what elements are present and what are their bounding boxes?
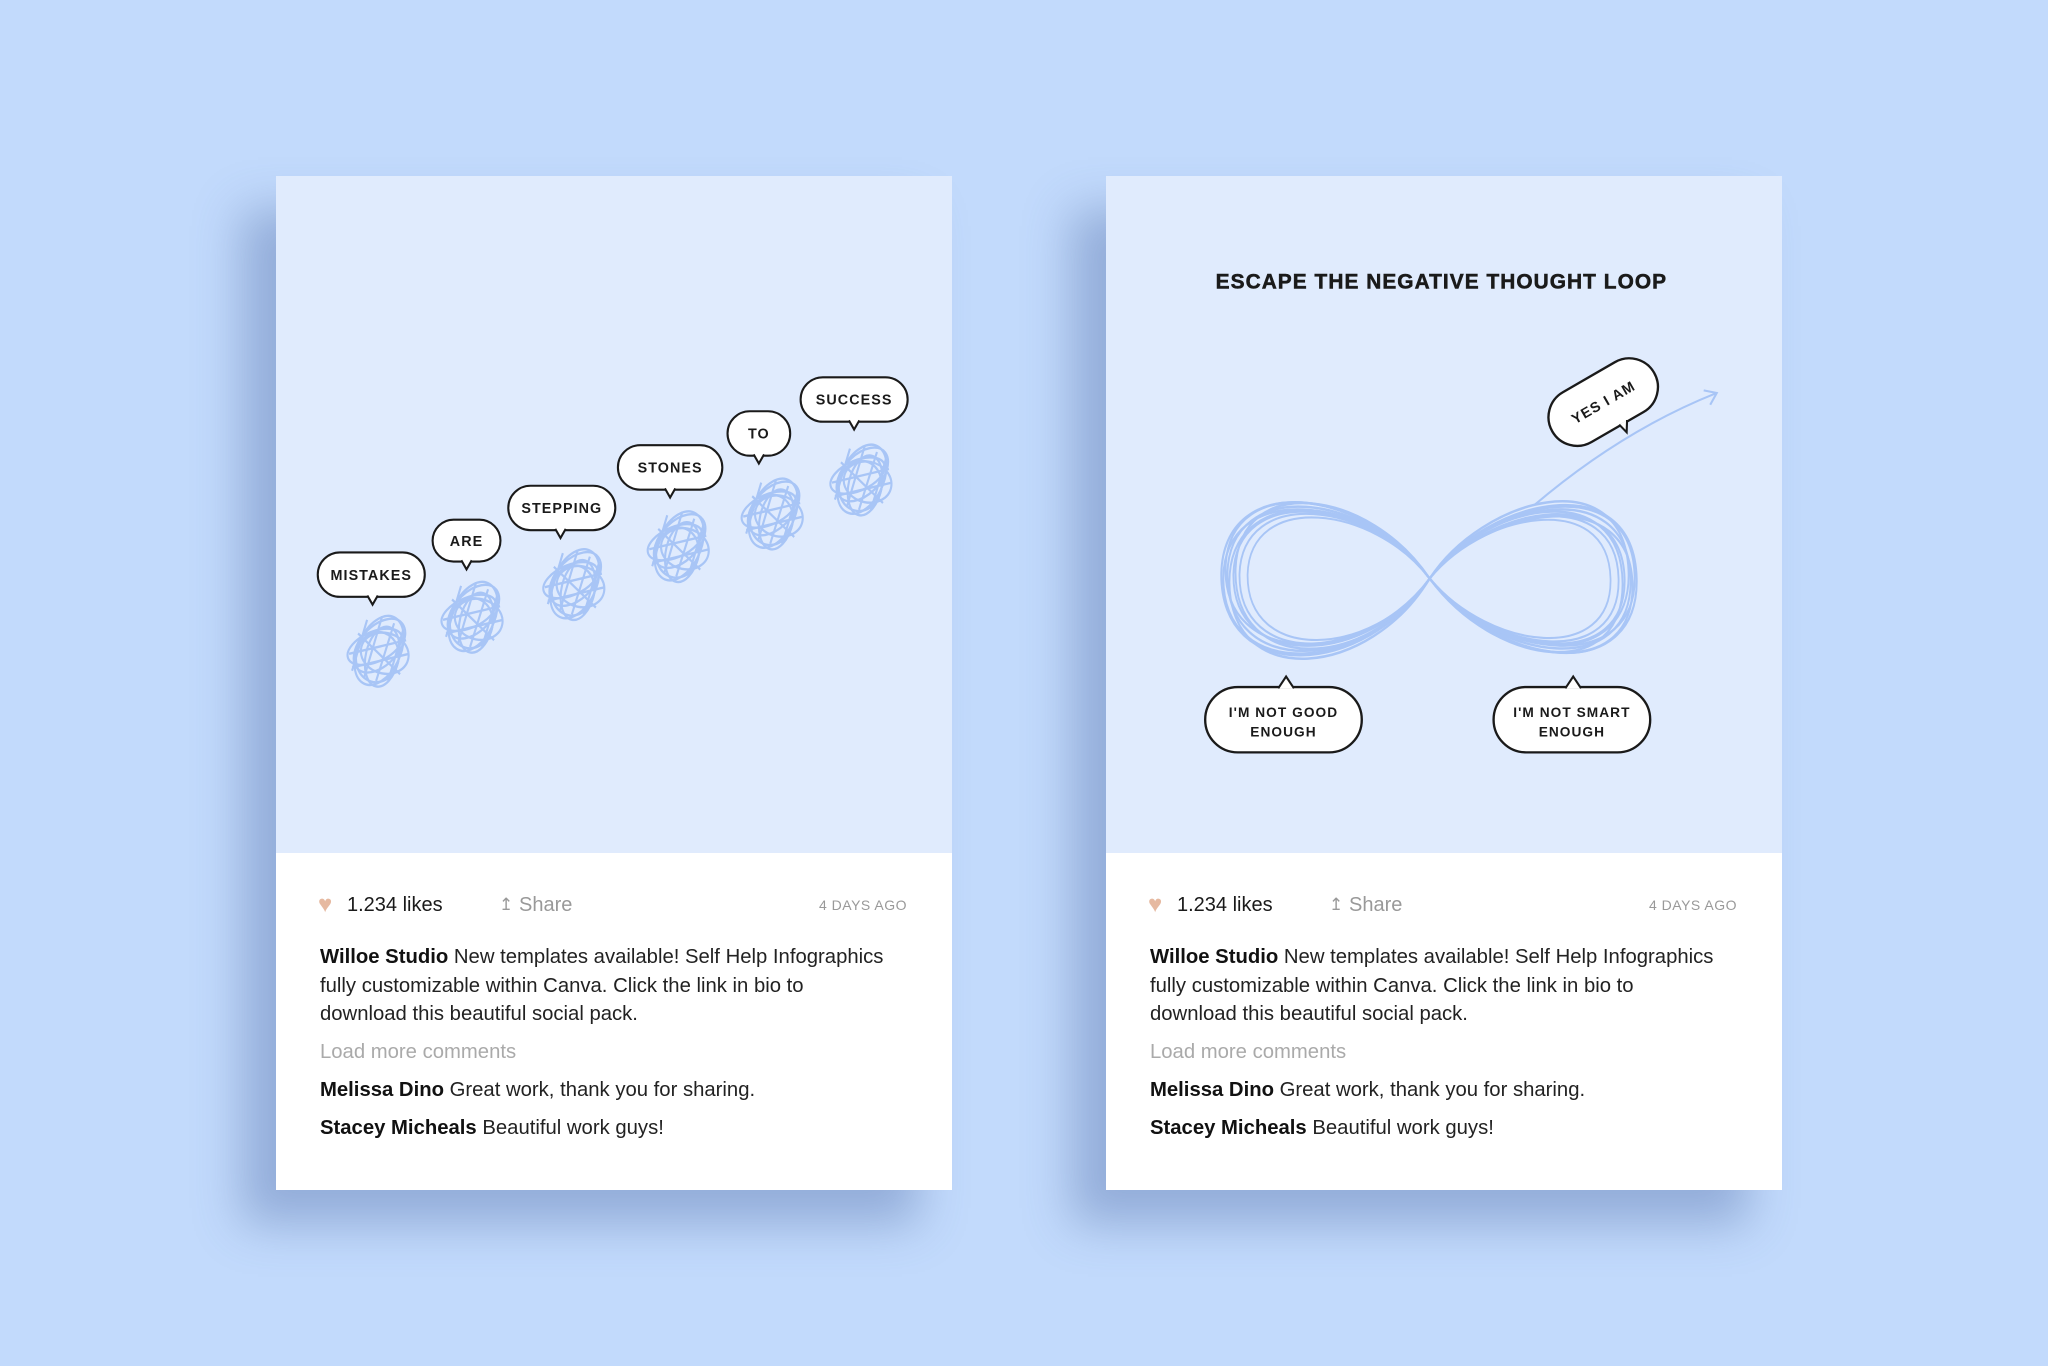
icon: heart: ♥: [318, 891, 332, 918]
footer: likes row: 1.234 likes: [1177, 894, 1273, 916]
icon: share: ↥: [499, 895, 513, 914]
infinity scribble: [1221, 495, 1637, 662]
bubble: yes i am: [1538, 348, 1673, 464]
speech bubbles: [318, 377, 908, 605]
card: negative thought loop: Melissa Dino Great work, thank you for sharing.: [1150, 1079, 1585, 1101]
footer: likes row: [318, 891, 907, 918]
bubble: not smart enough: I'M NOT SMART: [1513, 705, 1631, 720]
bubble words: MISTAKES: [331, 568, 412, 584]
footer: likes row: Share: [1349, 894, 1402, 916]
card: negative thought loop: fully customizable within Canva. Click the link in bio to: [1150, 975, 1634, 997]
card: mistakes are stepping stones: Willoe Studio New templates available! Self Help Infographics: [320, 946, 883, 968]
card: mistakes are stepping stones: Stacey Micheals Beautiful work guys!: [320, 1117, 664, 1139]
bubble words: ARE: [450, 534, 483, 550]
card: negative thought loop: [1106, 176, 1782, 1190]
card: mistakes are stepping stones: Load more comments: [320, 1041, 516, 1063]
icon: share: ↥: [1329, 895, 1343, 914]
bubble: not good enough: I'M NOT GOOD: [1229, 705, 1338, 720]
title: ESCAPE THE NEGATIVE THOUGHT LOOP: [1216, 270, 1667, 293]
card: mistakes are stepping stones: Melissa Dino Great work, thank you for sharing.: [320, 1079, 755, 1101]
bubble: yes i am: YES I AM: [1569, 379, 1638, 428]
scribbles: [343, 435, 897, 695]
card: mistakes are stepping stones: download this beautiful social pack.: [320, 1003, 638, 1025]
card: negative thought loop: download this beautiful social pack.: [1150, 1003, 1468, 1025]
illustration: infinity loop: [1106, 176, 1782, 853]
bubble: not good enough: ENOUGH: [1250, 725, 1317, 740]
caption text: [320, 946, 883, 1139]
bubble words: STEPPING: [521, 501, 602, 517]
card: mistakes are stepping stones: [276, 176, 952, 1190]
bubble words: STONES: [638, 461, 703, 477]
footer: likes row: Share: [519, 894, 572, 916]
card: negative thought loop: Willoe Studio New templates available! Self Help Infographics: [1150, 946, 1713, 968]
card: negative thought loop: Load more comments: [1150, 1041, 1346, 1063]
bubble: not smart enough: [1494, 677, 1650, 752]
bubble: not good enough: [1205, 677, 1362, 752]
footer: likes row: 1.234 likes: [347, 894, 443, 916]
arrow: [1534, 390, 1717, 505]
bubble words: [331, 393, 892, 584]
footer: likes row: [1148, 891, 1737, 918]
illustration: stepping stones: [276, 176, 952, 853]
footer: likes row: 4 DAYS AGO: [1649, 897, 1737, 913]
footer: likes row: 4 DAYS AGO: [819, 897, 907, 913]
bubble words: TO: [748, 427, 770, 443]
icon: heart: ♥: [1148, 891, 1162, 918]
bubble words: SUCCESS: [816, 393, 892, 409]
bubble: not smart enough: ENOUGH: [1539, 725, 1605, 740]
card: mistakes are stepping stones: fully customizable within Canva. Click the link in bio to: [320, 975, 804, 997]
caption text: [1150, 946, 1713, 1139]
card: negative thought loop: Stacey Micheals Beautiful work guys!: [1150, 1117, 1494, 1139]
